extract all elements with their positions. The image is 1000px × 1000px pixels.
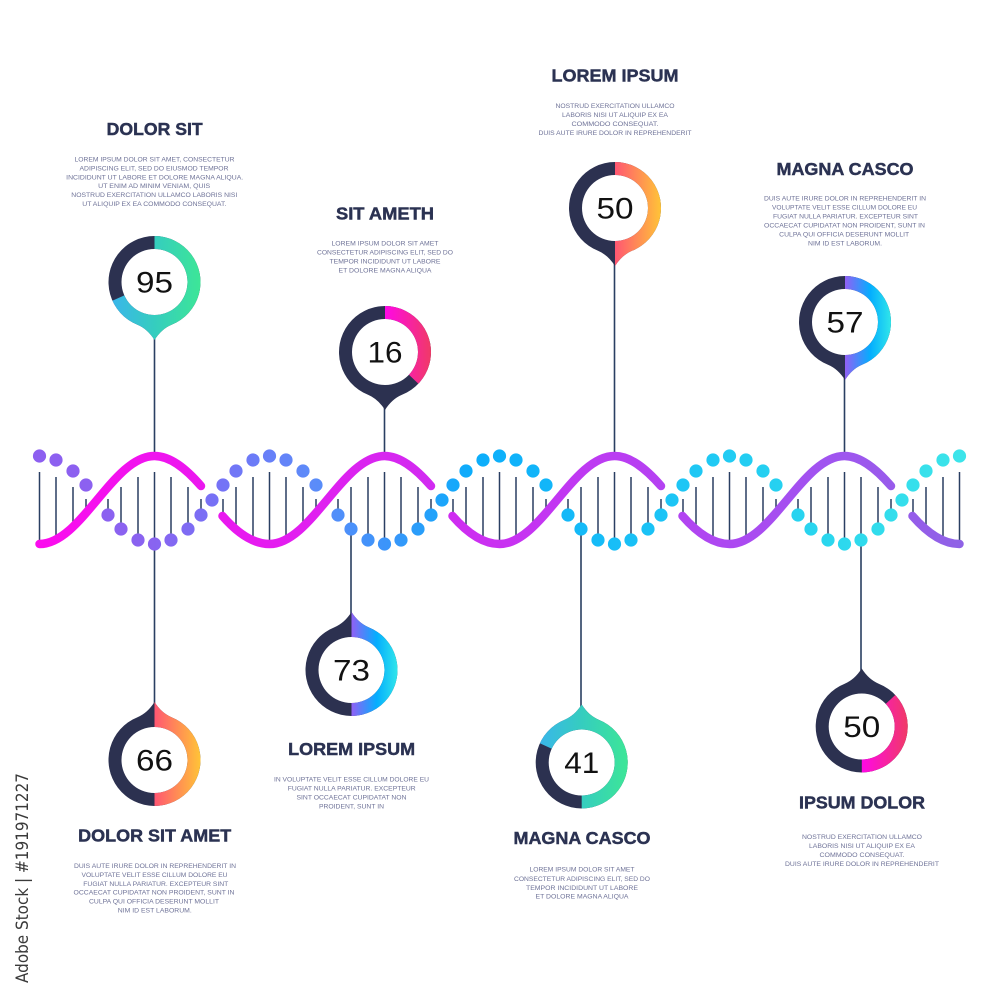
pin gauge: 73 — [306, 612, 398, 716]
text block: ipsum dolor: DUIS AUTE IRURE DOLOR IN REPREHENDERIT — [785, 861, 939, 868]
text block: dolor sit amet: VOLUPTATE VELIT ESSE CILLUM DOLORE EU — [82, 872, 228, 879]
text block: magna casco bottom: TEMPOR INCIDIDUNT UT LABORE — [526, 885, 638, 892]
heading: sit ameth: SIT AMETH — [336, 203, 434, 223]
panel: lorem ipsum bottom — [274, 612, 429, 810]
text block: magna casco bottom: CONSECTETUR ADIPISCING ELIT, SED DO — [514, 876, 650, 883]
text block: ipsum dolor: NOSTRUD EXERCITATION ULLAMCO — [802, 834, 922, 841]
text block: dolor sit amet: NIM ID EST LABORUM. — [118, 908, 192, 915]
text block: dolor sit: ADIPISCING ELIT, SED DO EIUSMOD TEMPOR — [80, 166, 229, 173]
text block: lorem ipsum bottom: FUGIAT NULLA PARIATUR. EXCEPTEUR — [288, 785, 416, 792]
text block: sit ameth — [317, 241, 453, 275]
pin gauge: 66 — [108, 702, 200, 806]
pin gauge: 57: 57 — [826, 306, 864, 340]
pin gauge: 57 — [799, 276, 891, 380]
text block: dolor sit amet: DUIS AUTE IRURE DOLOR IN REPREHENDERIT IN — [74, 863, 236, 870]
panel: magna casco bottom — [514, 704, 650, 901]
text block: dolor sit amet — [74, 863, 236, 915]
text block: magna casco top: FUGIAT NULLA PARIATUR. EXCEPTEUR SINT — [773, 214, 918, 221]
pin gauge: 50 top: 50 — [596, 192, 634, 226]
text block: ipsum dolor: LABORIS NISI UT ALIQUIP EX EA — [809, 843, 915, 850]
text block: dolor sit: LOREM IPSUM DOLOR SIT AMET, CONSECTETUR — [74, 157, 235, 164]
pin gauge: 41: 41 — [564, 747, 599, 780]
panel: magna casco top — [764, 159, 926, 380]
text block: ipsum dolor: COMMODO CONSEQUAT. — [820, 852, 905, 859]
pin gauge: 50 bottom: 50 — [843, 711, 880, 744]
text block: sit ameth: CONSECTETUR ADIPISCING ELIT, SED DO — [317, 250, 453, 257]
stock image credit: Adobe Stock | #191971227 — [13, 773, 33, 983]
text block: magna casco top — [764, 196, 926, 247]
pin gauge: 95 — [108, 236, 200, 340]
text block: sit ameth: TEMPOR INCIDIDUNT UT LABORE — [330, 259, 441, 266]
pin gauge: 95: 95 — [136, 266, 173, 300]
text block: lorem ipsum top — [538, 103, 692, 137]
text block: magna casco top: OCCAECAT CUPIDATAT NON PROIDENT, SUNT IN — [764, 222, 925, 229]
DNA dots strand — [33, 449, 966, 551]
text block: sit ameth: LOREM IPSUM DOLOR SIT AMET — [332, 241, 438, 248]
pin gauge: 50 bottom — [816, 668, 908, 772]
pin gauge: 73: 73 — [333, 654, 370, 688]
text block: dolor sit: NOSTRUD EXERCITATION ULLAMCO LABORIS NISI — [71, 192, 237, 199]
text block: dolor sit: UT ENIM AD MINIM VENIAM, QUIS — [98, 183, 211, 190]
DNA base-pair rungs — [40, 472, 960, 544]
text block: magna casco bottom: LOREM IPSUM DOLOR SIT AMET — [530, 867, 634, 874]
heading: lorem ipsum top: LOREM IPSUM — [552, 66, 678, 86]
panel: sit ameth — [317, 203, 453, 410]
text block: magna casco top: CULPA QUI OFFICIA DESERUNT MOLLIT — [779, 231, 909, 238]
text block: lorem ipsum top: COMMODO CONSEQUAT. — [572, 121, 659, 128]
text block: lorem ipsum bottom: IN VOLUPTATE VELIT ESSE CILLUM DOLORE EU — [274, 776, 429, 783]
text block: magna casco top: VOLUPTATE VELIT ESSE CILLUM DOLORE EU — [772, 205, 917, 212]
text block: dolor sit amet: CULPA QUI OFFICIA DESERUNT MOLLIT — [89, 899, 219, 906]
text block: magna casco top: NIM ID EST LABORUM. — [808, 240, 882, 247]
heading: lorem ipsum bottom: LOREM IPSUM — [288, 739, 415, 759]
text block: lorem ipsum top: LABORIS NISI UT ALIQUIP EX EA — [562, 112, 668, 119]
pin gauge: 50 top — [569, 162, 661, 266]
panel: dolor sit — [66, 119, 243, 340]
text block: lorem ipsum bottom: PROIDENT, SUNT IN — [319, 803, 384, 810]
text block: lorem ipsum bottom — [274, 776, 429, 810]
panel: ipsum dolor — [785, 668, 939, 868]
heading: magna casco bottom: MAGNA CASCO — [514, 828, 650, 848]
heading: ipsum dolor: IPSUM DOLOR — [799, 792, 925, 812]
pin gauge: 16: 16 — [368, 336, 402, 370]
heading: dolor sit amet: DOLOR SIT AMET — [78, 826, 232, 846]
heading: magna casco top: MAGNA CASCO — [776, 159, 914, 179]
text block: dolor sit: INCIDIDUNT UT LABORE ET DOLORE MAGNA ALIQUA. — [66, 174, 243, 181]
panel: dolor sit amet — [74, 702, 236, 915]
text block: dolor sit amet: OCCAECAT CUPIDATAT NON PROIDENT, SUNT IN — [74, 890, 235, 897]
panel: lorem ipsum top — [538, 66, 692, 266]
text block: dolor sit amet: FUGIAT NULLA PARIATUR. EXCEPTEUR SINT — [83, 881, 228, 888]
text block: dolor sit: UT ALIQUIP EX EA COMMODO CONSEQUAT. — [82, 201, 226, 208]
text block: lorem ipsum top: DUIS AUTE IRURE DOLOR IN REPREHENDERIT — [538, 130, 692, 137]
text block: magna casco bottom — [514, 867, 650, 901]
pin gauge: 66: 66 — [136, 744, 173, 778]
pin gauge: 16 — [339, 306, 431, 410]
heading: dolor sit: DOLOR SIT — [107, 119, 203, 139]
text block: lorem ipsum bottom: SINT OCCAECAT CUPIDATAT NON — [296, 794, 407, 801]
text block: magna casco bottom: ET DOLORE MAGNA ALIQUA — [536, 894, 629, 901]
text block: magna casco top: DUIS AUTE IRURE DOLOR IN REPREHENDERIT IN — [764, 196, 926, 203]
callout connector lines — [154, 260, 861, 710]
DNA ribbon strand — [40, 456, 960, 544]
text block: dolor sit — [66, 157, 243, 208]
text block: sit ameth: ET DOLORE MAGNA ALIQUA — [338, 268, 432, 275]
text block: lorem ipsum top: NOSTRUD EXERCITATION ULLAMCO — [556, 103, 674, 110]
text block: ipsum dolor — [785, 834, 939, 868]
pin gauge: 41 — [536, 704, 628, 808]
